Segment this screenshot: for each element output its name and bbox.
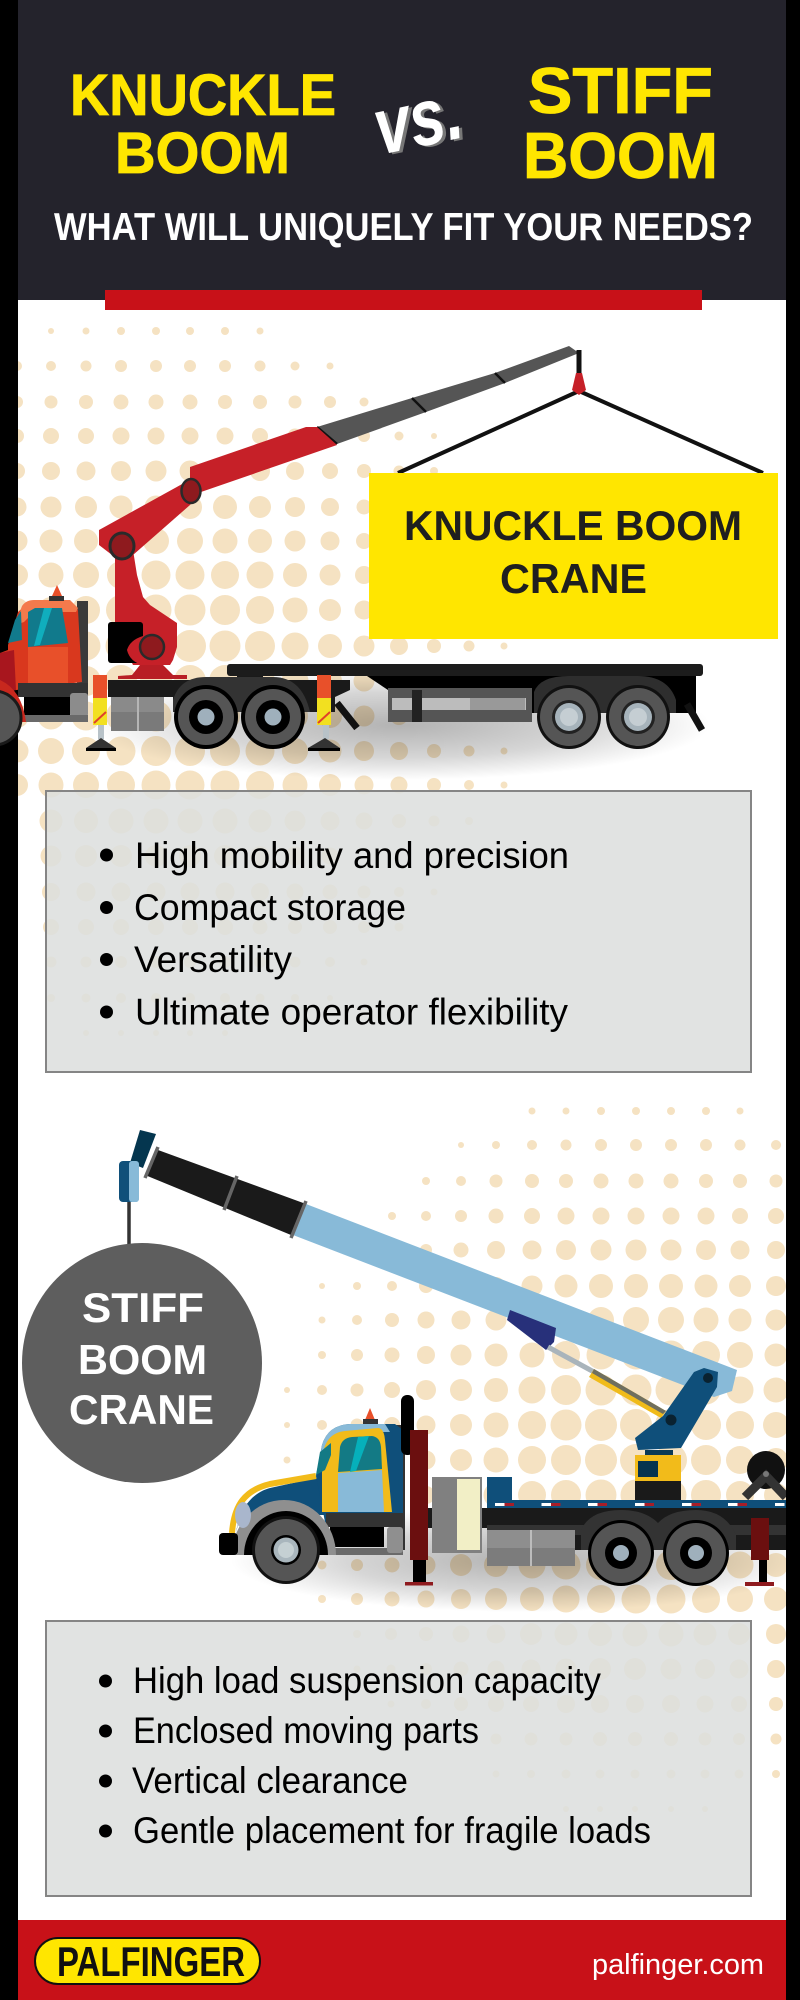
badge: stiff boom crane: CRANE xyxy=(69,1386,214,1433)
chassis and rear wheels xyxy=(108,676,357,749)
badge: stiff boom crane: STIFF xyxy=(82,1284,204,1331)
ground shadow: stiff truck xyxy=(230,1508,800,1612)
heading: knuckle boom: KNUCKLE xyxy=(70,63,336,128)
heading: knuckle boom xyxy=(70,63,336,186)
sign: knuckle boom crane xyxy=(369,473,778,639)
header band xyxy=(18,0,786,310)
sling and hook xyxy=(398,350,763,473)
heading: stiff boom: STIFF xyxy=(528,54,713,127)
bullet list: High load suspension capacity xyxy=(133,1660,601,1701)
red accent bar xyxy=(105,290,702,310)
sign: knuckle boom crane: KNUCKLE BOOM xyxy=(404,502,742,549)
logo: palfinger: PALFINGER xyxy=(57,1938,245,1985)
versus mark: vs. xyxy=(365,66,470,172)
versus mark: vs. xyxy=(369,68,473,173)
boom xyxy=(119,1130,737,1500)
flatbed xyxy=(428,1477,787,1586)
knuckle boom crane truck xyxy=(0,346,703,751)
trailer xyxy=(227,664,703,749)
cable reel xyxy=(745,1451,786,1497)
heading: stiff boom: BOOM xyxy=(523,119,718,192)
bullet list: Compact storage xyxy=(134,887,406,928)
footer band xyxy=(18,1920,786,2000)
heading: stiff boom xyxy=(523,54,718,192)
crane arm xyxy=(99,346,579,679)
bullet list: Enclosed moving parts xyxy=(133,1710,479,1751)
sign: knuckle boom crane: CRANE xyxy=(500,555,647,602)
bullet list: Ultimate operator flexibility xyxy=(135,992,568,1032)
bullet list xyxy=(99,1660,651,1851)
badge: stiff boom crane: BOOM xyxy=(78,1336,207,1383)
bullet list: Versatility xyxy=(134,939,292,980)
boom cable xyxy=(127,1200,131,1245)
bullet list: High mobility and precision xyxy=(135,835,569,876)
website: palfinger.com xyxy=(592,1949,764,1981)
heading: knuckle boom: BOOM xyxy=(115,121,290,186)
outrigger legs xyxy=(86,675,340,751)
panel: knuckle boom benefits xyxy=(46,791,751,1072)
ground shadow: knuckle truck xyxy=(90,670,710,780)
bullet list: Gentle placement for fragile loads xyxy=(133,1810,651,1851)
stiff boom crane truck xyxy=(119,1130,787,1586)
cab xyxy=(0,585,88,745)
bullet list xyxy=(100,835,569,1032)
cab xyxy=(219,1395,433,1586)
panel: stiff boom benefits xyxy=(46,1621,751,1896)
bullet list: Vertical clearance xyxy=(132,1760,408,1801)
badge: stiff boom crane xyxy=(22,1243,262,1483)
